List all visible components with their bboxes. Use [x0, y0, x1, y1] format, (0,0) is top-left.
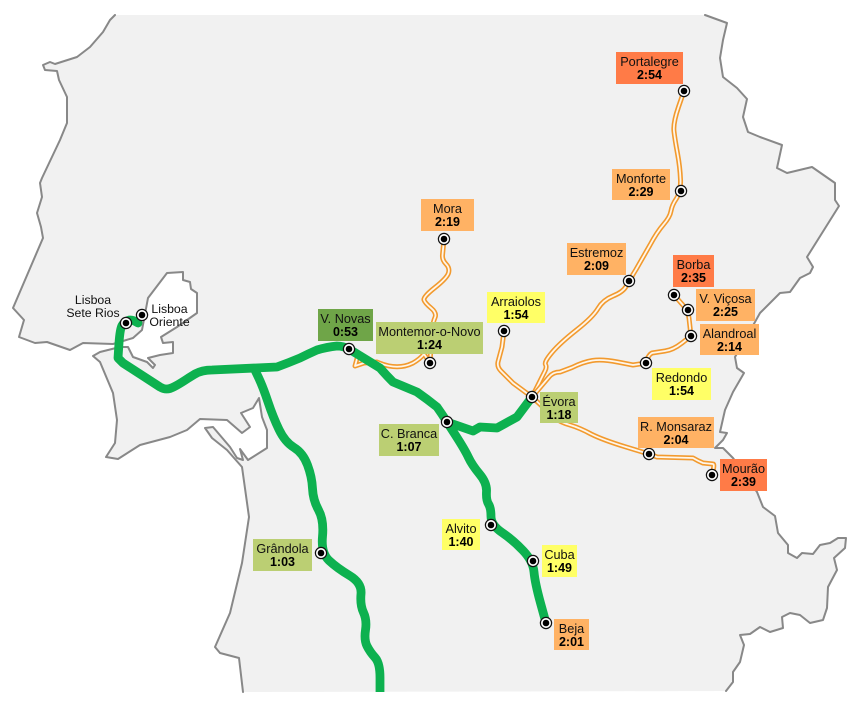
label: Montemor-o-Novo 1:24: 1:24: [417, 338, 442, 352]
label: Monforte 2:29: Monforte: [616, 172, 666, 186]
label: Monforte 2:29: 2:29: [628, 185, 654, 199]
label: Évora 1:18: [540, 392, 578, 423]
label: Monforte 2:29: [612, 169, 670, 200]
label: Portalegre 2:54: [616, 52, 683, 84]
label: Cuba 1:49: [542, 545, 577, 577]
label: Portalegre 2:54: 2:54: [637, 68, 662, 82]
label: V. Novas 0:53: V. Novas: [320, 312, 371, 326]
label: C. Branca 1:07: 1:07: [396, 440, 422, 454]
label: Mourão 2:39: 2:39: [731, 475, 756, 489]
green rail main line: Lisboa to Evora: [118, 320, 532, 431]
orange route: Arraiolos to Evora: [498, 331, 532, 397]
label: Arraiolos 1:54: Arraiolos: [491, 295, 541, 309]
label: Alvito 1:40: [442, 519, 480, 550]
label: Portalegre 2:54: Portalegre: [620, 55, 679, 69]
label: Grândola 1:03: [253, 539, 312, 571]
label: Alvito 1:40: 1:40: [448, 535, 474, 549]
label: Beja 2:01: [554, 619, 589, 650]
label: Montemor-o-Novo 1:24: [376, 322, 483, 354]
label: Mora 2:19: [421, 199, 474, 231]
label: C. Branca 1:07: [379, 424, 439, 456]
label: Estremoz 2:09: Estremoz: [570, 246, 623, 260]
label: Montemor-o-Novo 1:24: Montemor-o-Novo: [378, 325, 481, 339]
label: Beja 2:01: 2:01: [559, 635, 584, 649]
label: Mourão 2:39: Mourão: [722, 462, 765, 476]
label: Borba 2:35: 2:35: [681, 271, 706, 285]
label: Grândola 1:03: 1:03: [270, 555, 295, 569]
west coastline: [13, 15, 267, 692]
label: Estremoz 2:09: 2:09: [584, 259, 609, 273]
label: R. Monsaraz 2:04: 2:04: [663, 433, 689, 447]
label: Lisboa Sete Rios: Lisboa: [75, 293, 111, 307]
label: V. Novas 0:53: 0:53: [333, 325, 358, 339]
label: Évora 1:18: Évora: [542, 394, 577, 409]
label: Évora 1:18: 1:18: [546, 408, 572, 422]
eastern border: [705, 15, 846, 691]
label: Estremoz 2:09: [567, 243, 626, 275]
label: Borba 2:35: [673, 255, 714, 287]
label: Arraiolos 1:54: [487, 292, 545, 323]
label: V. Novas 0:53: [318, 309, 373, 341]
label: C. Branca 1:07: C. Branca: [381, 427, 438, 441]
orange route: Evora to Portalegre: [532, 91, 684, 397]
station markers: [120, 85, 718, 629]
label: V. Viçosa 2:25: 2:25: [713, 305, 738, 319]
orange route: Evora to Borba: [532, 295, 691, 397]
label: Lisboa Sete Rios: Sete Rios: [66, 306, 120, 320]
label: Lisboa Oriente: Lisboa: [151, 302, 188, 316]
label: Redondo 1:54: [652, 368, 711, 400]
label: Cuba 1:49: 1:49: [547, 561, 572, 575]
label: V. Viçosa 2:25: [696, 289, 755, 321]
label: Beja 2:01: Beja: [559, 622, 585, 636]
label: Alvito 1:40: Alvito: [445, 522, 477, 536]
orange route: Mora to Montemor-o-Novo: [424, 239, 449, 363]
orange route: Vendas Novas to Montemor-o-Novo: [355, 354, 430, 367]
label: Cuba 1:49: Cuba: [544, 548, 576, 562]
label: Grândola 1:03: Grândola: [256, 542, 310, 556]
label: Borba 2:35: Borba: [677, 258, 711, 272]
label: Lisboa Oriente: [149, 302, 190, 329]
label: Alandroal 2:14: Alandroal: [703, 327, 756, 341]
label: R. Monsaraz 2:04: [638, 417, 714, 448]
label: Mora 2:19: Mora: [433, 202, 463, 216]
label: Lisboa Oriente: Oriente: [149, 315, 190, 329]
green rail line: to Grandola and south: [254, 368, 380, 692]
label: Alandroal 2:14: 2:14: [717, 340, 742, 354]
label: R. Monsaraz 2:04: R. Monsaraz: [640, 420, 712, 434]
orange route: Evora to Mourao: [532, 397, 714, 475]
green rail line: to Beja: [447, 422, 546, 623]
label: Lisboa Sete Rios: [66, 293, 120, 320]
label: Mora 2:19: 2:19: [435, 215, 460, 229]
label: Arraiolos 1:54: 1:54: [503, 308, 529, 322]
label: Redondo 1:54: Redondo: [656, 371, 707, 385]
label: Mourão 2:39: [720, 459, 767, 491]
label: Redondo 1:54: 1:54: [669, 384, 694, 398]
label: V. Viçosa 2:25: V. Viçosa: [699, 292, 753, 306]
label: Alandroal 2:14: [700, 324, 759, 355]
